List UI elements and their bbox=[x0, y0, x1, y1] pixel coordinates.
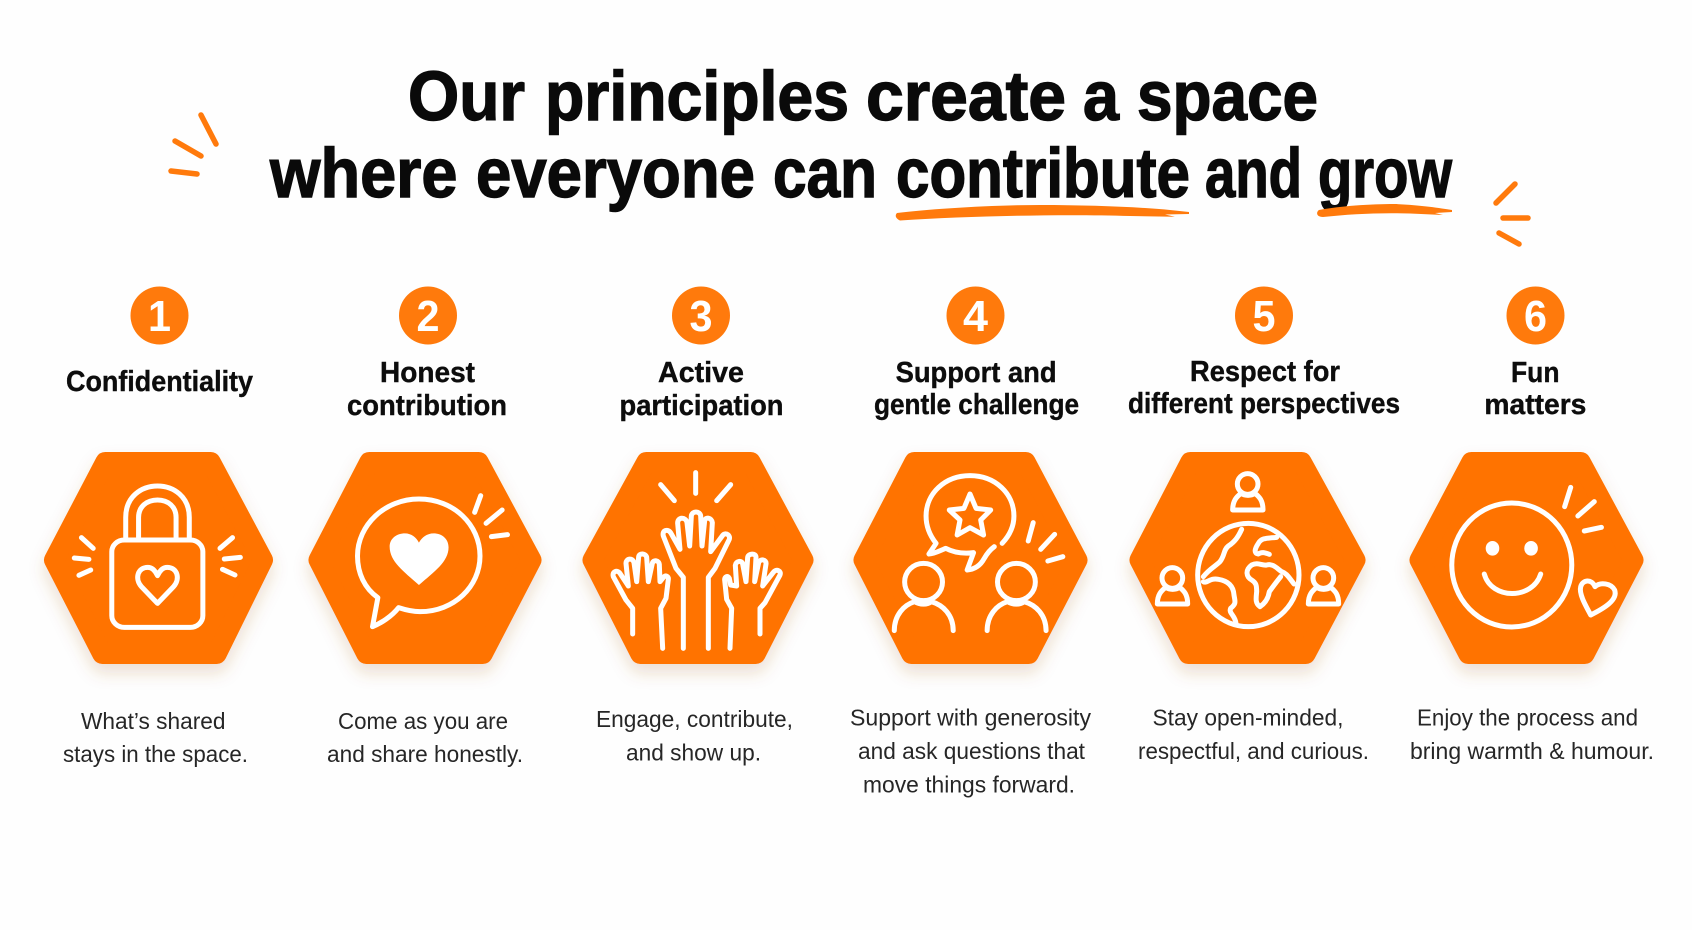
title bbox=[269, 57, 1452, 212]
hexagon 5 bbox=[1140, 462, 1356, 654]
title: where bbox=[269, 134, 458, 212]
hexagon 2 bbox=[318, 462, 532, 654]
number badge 3: 3 bbox=[690, 292, 712, 341]
icon: globe with three people bbox=[1157, 474, 1339, 627]
description 4: move things forward. bbox=[863, 772, 1075, 798]
title: contribute bbox=[896, 134, 1190, 212]
number badge 3 bbox=[672, 286, 730, 344]
description 3 bbox=[596, 706, 793, 766]
heading 4: Support and bbox=[896, 357, 1057, 389]
title: can bbox=[773, 134, 877, 212]
hexagon 1 bbox=[54, 462, 263, 654]
principle 2: honest contribution bbox=[318, 286, 532, 767]
icon: smiley with heart bbox=[1452, 487, 1615, 627]
title: a bbox=[1083, 57, 1120, 135]
underline: grow bbox=[1317, 204, 1452, 217]
description 4 bbox=[850, 705, 1091, 798]
number badge 4: 4 bbox=[963, 292, 989, 341]
hexagon 3 bbox=[592, 462, 804, 654]
heading 3: Active bbox=[658, 357, 744, 389]
description 6: Enjoy the process and bbox=[1417, 705, 1638, 731]
principle 4: support and gentle challenge bbox=[850, 286, 1091, 798]
number badge 2: 2 bbox=[416, 292, 440, 341]
hexagon 4 bbox=[864, 462, 1078, 654]
icon: raised hands bbox=[613, 473, 780, 648]
number badge 1: 1 bbox=[148, 292, 171, 341]
title: everyone bbox=[476, 134, 755, 212]
number badge 6: 6 bbox=[1524, 292, 1547, 341]
heading 5 bbox=[1128, 356, 1400, 420]
heading 4: gentle challenge bbox=[874, 389, 1079, 421]
heading 4 bbox=[874, 357, 1079, 421]
icon: padlock with heart bbox=[74, 486, 240, 627]
heading 2: Honest bbox=[380, 357, 475, 389]
description 1 bbox=[63, 708, 248, 767]
sparks: left of title bbox=[171, 115, 216, 174]
description 5: Stay open-minded, bbox=[1152, 705, 1344, 731]
principle 3: active participation bbox=[592, 286, 804, 766]
principle 1: confidentiality bbox=[54, 286, 263, 767]
description 2: and share honestly. bbox=[327, 741, 523, 767]
sparks: right of title bbox=[1496, 184, 1528, 244]
description 3: and show up. bbox=[626, 740, 761, 766]
description 5 bbox=[1138, 705, 1369, 764]
principle 6: fun matters bbox=[1410, 286, 1654, 764]
heading 6: Fun bbox=[1511, 357, 1560, 389]
principle 5: respect for different perspectives bbox=[1128, 286, 1400, 764]
heading 5: different perspectives bbox=[1128, 388, 1400, 420]
number badge 4 bbox=[946, 286, 1004, 344]
description 4: Support with generosity bbox=[850, 705, 1091, 731]
title: grow bbox=[1318, 134, 1452, 212]
number badge 6 bbox=[1506, 286, 1564, 344]
description 3: Engage, contribute, bbox=[596, 706, 793, 732]
icon: speech bubble with heart bbox=[357, 496, 507, 627]
heading 2 bbox=[347, 357, 507, 422]
description 4: and ask questions that bbox=[858, 738, 1086, 764]
description 1: stays in the space. bbox=[63, 741, 248, 767]
number badge 2 bbox=[399, 286, 457, 344]
heading 5: Respect for bbox=[1190, 356, 1340, 388]
heading 3: participation bbox=[620, 390, 784, 422]
description 1: What’s shared bbox=[81, 708, 226, 734]
description 6 bbox=[1410, 705, 1654, 764]
heading 1: Confidentiality bbox=[66, 366, 253, 398]
description 5: respectful, and curious. bbox=[1138, 738, 1369, 764]
heading 6 bbox=[1484, 357, 1586, 421]
description 6: bring warmth & humour. bbox=[1410, 738, 1654, 764]
heading 3 bbox=[620, 357, 784, 422]
description 2 bbox=[327, 708, 523, 767]
description 2: Come as you are bbox=[338, 708, 508, 734]
number badge 1 bbox=[130, 286, 188, 344]
title: create bbox=[866, 57, 1066, 135]
hexagon 6 bbox=[1420, 462, 1634, 654]
heading 6: matters bbox=[1484, 389, 1586, 421]
icon: two people with star bubble bbox=[894, 476, 1063, 631]
heading 2: contribution bbox=[347, 390, 507, 422]
title: principles bbox=[545, 57, 849, 135]
title: and bbox=[1205, 134, 1302, 212]
number badge 5 bbox=[1235, 286, 1293, 344]
title: Our bbox=[408, 57, 525, 135]
underline: contribute bbox=[896, 205, 1189, 220]
title: space bbox=[1137, 57, 1318, 135]
number badge 5: 5 bbox=[1252, 292, 1276, 341]
